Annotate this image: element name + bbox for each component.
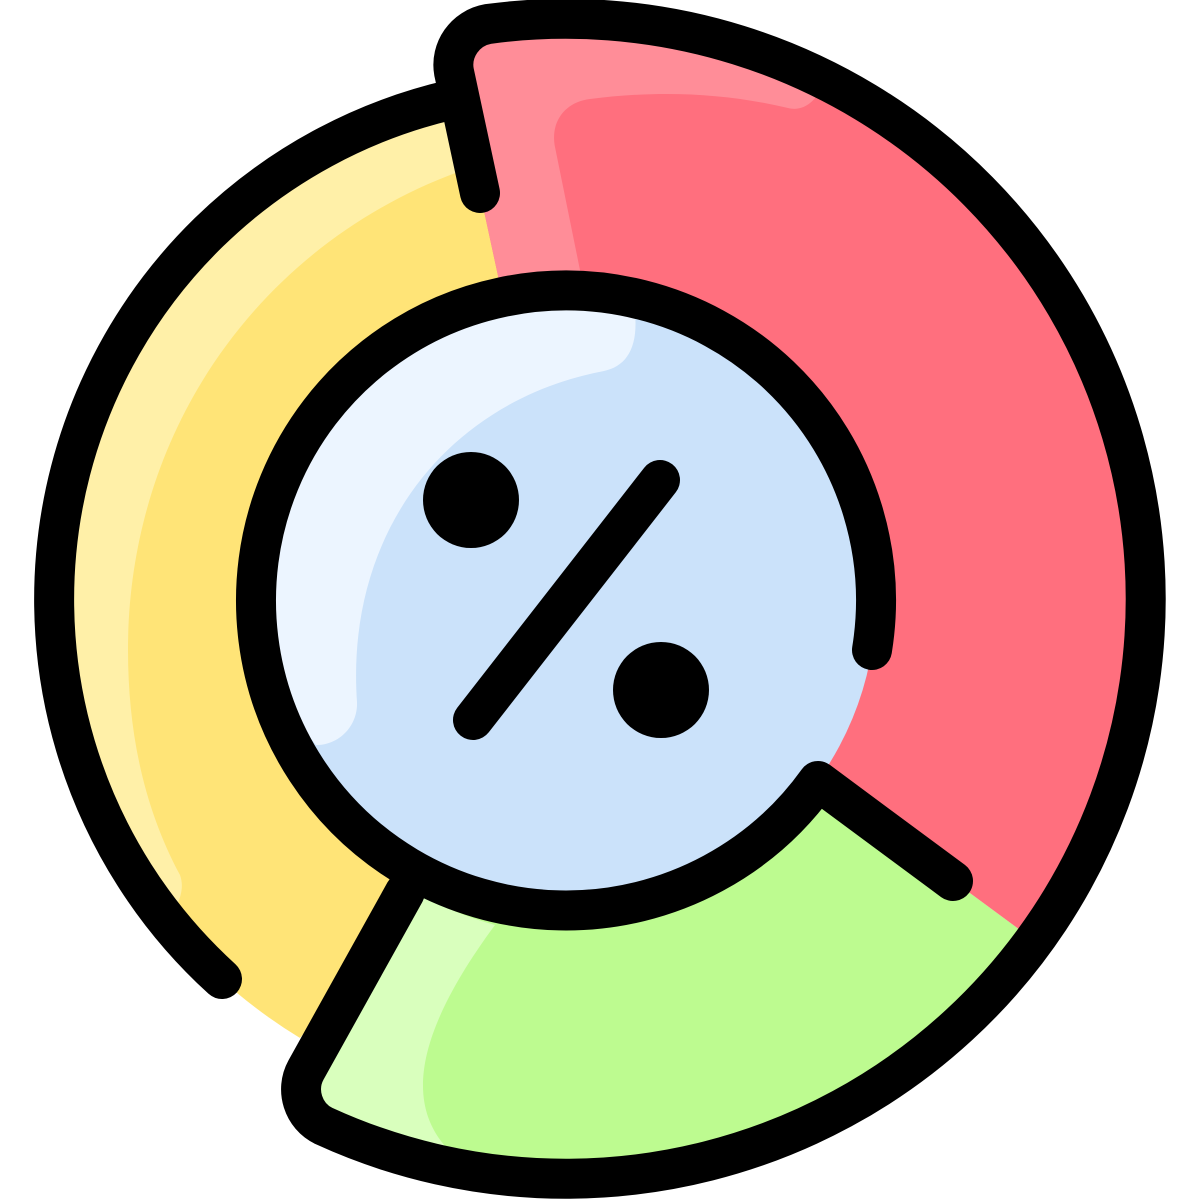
outer right arc [301, 19, 1146, 1179]
outer left arc [54, 100, 450, 979]
inner ring [256, 290, 953, 910]
percent dots [423, 452, 709, 738]
magnifier lens [256, 290, 876, 910]
yellow segment [53, 100, 566, 1038]
percent slash [473, 480, 660, 720]
red segment [453, 19, 1147, 941]
green segment [301, 600, 1035, 1179]
